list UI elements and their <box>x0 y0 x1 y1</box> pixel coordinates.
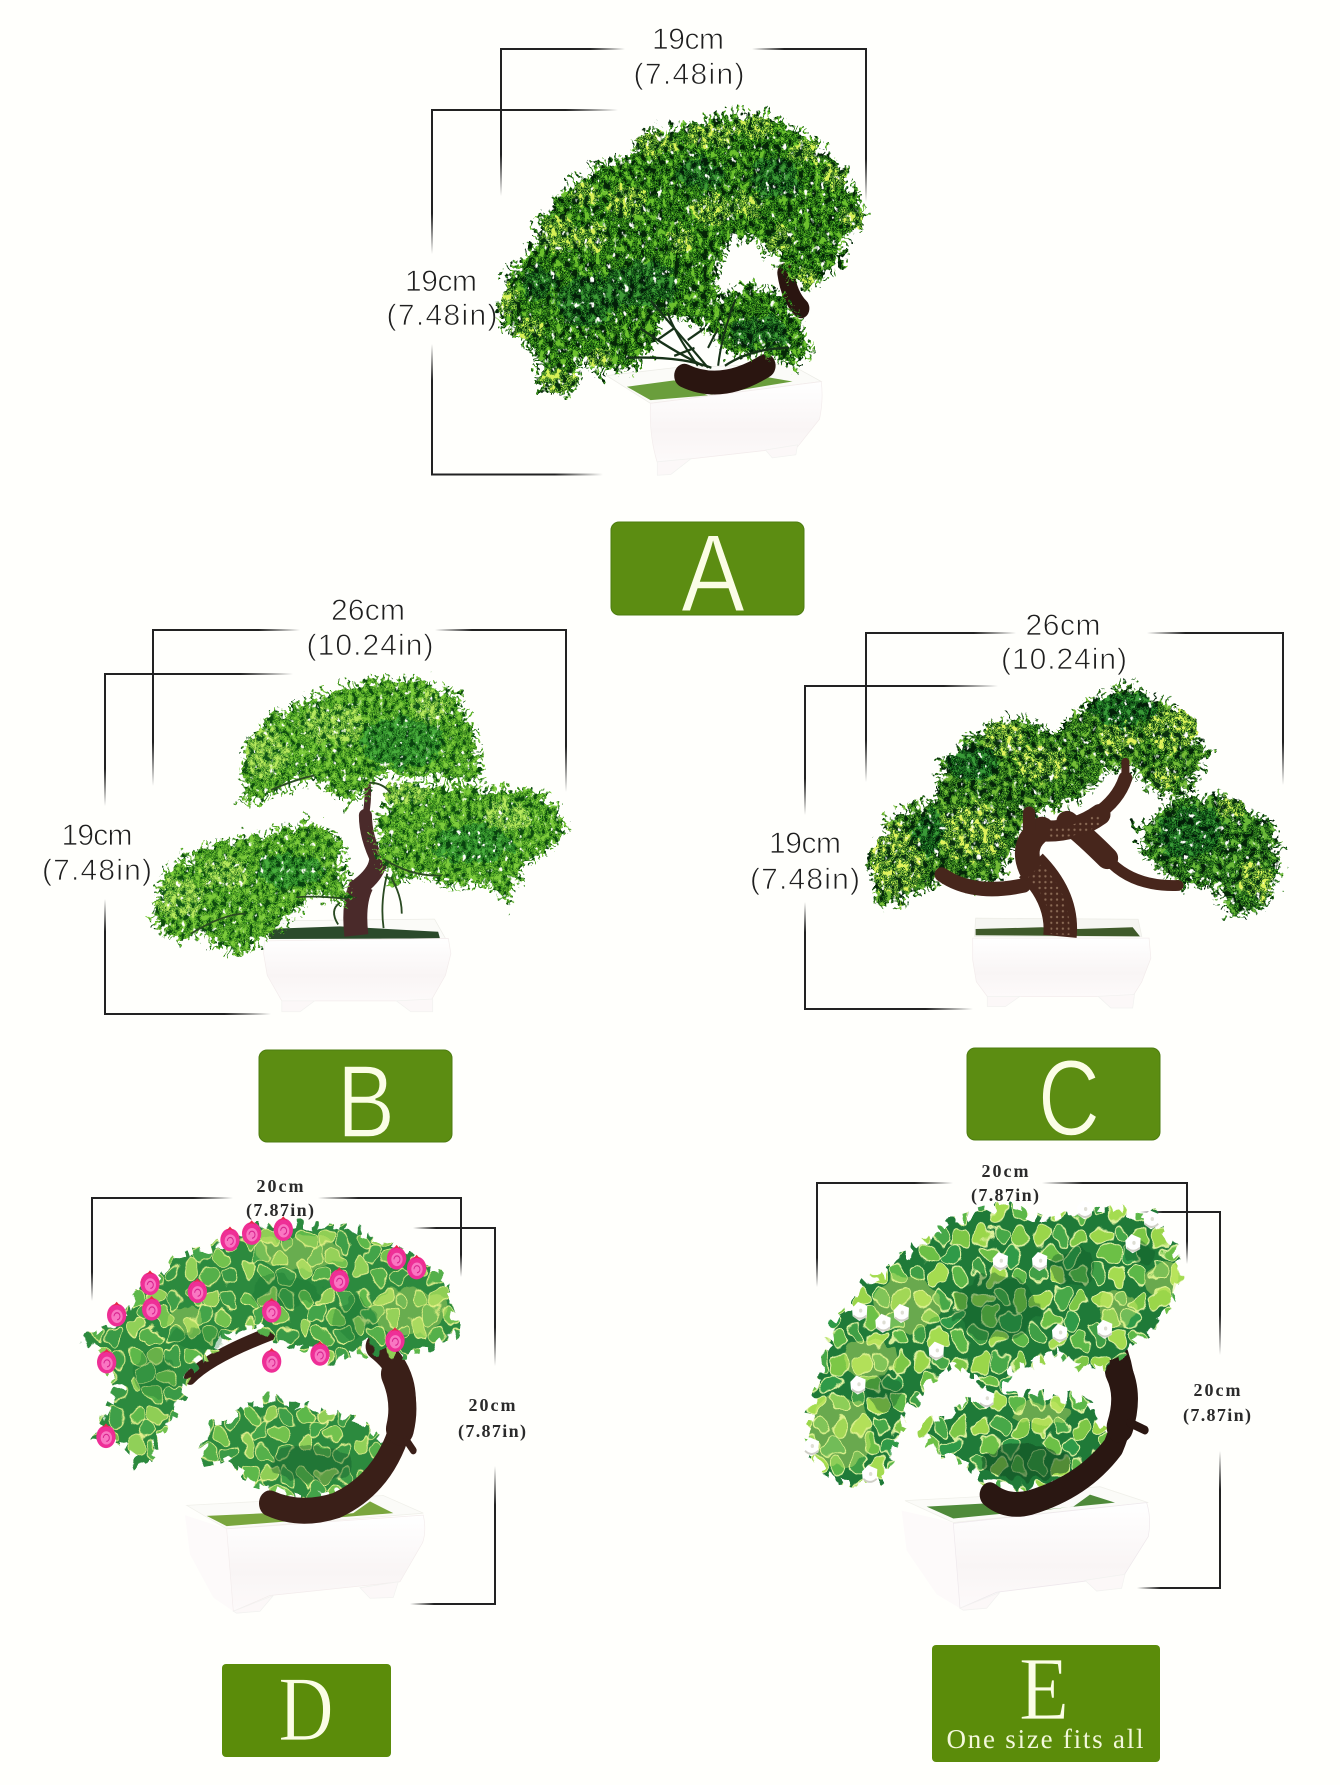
plant E <box>804 1200 1180 1610</box>
width label B: (10.24in) <box>306 629 434 662</box>
trunk A <box>684 273 801 383</box>
label badge A: A <box>681 512 746 635</box>
panel: bonsai B <box>42 594 567 1159</box>
plant B <box>155 681 567 1012</box>
pot D <box>185 1496 425 1613</box>
small bush D <box>208 1401 390 1496</box>
width label C: 26cm <box>1026 609 1100 642</box>
height label B <box>42 819 152 887</box>
width label D: 20cm <box>256 1176 304 1196</box>
width label A <box>634 23 744 91</box>
dimension brackets D <box>91 1197 496 1605</box>
trunk E <box>990 1355 1145 1504</box>
height label D: (7.87in) <box>458 1421 526 1442</box>
plant D <box>90 1216 453 1613</box>
width label E: 20cm <box>982 1161 1028 1181</box>
trunk D <box>190 1311 413 1511</box>
label badge D: D <box>278 1658 334 1760</box>
label badge E: One size fits all <box>946 1724 1144 1754</box>
label badge C: C <box>1038 1037 1100 1158</box>
foliage D <box>90 1229 453 1464</box>
pot E <box>902 1487 1150 1610</box>
pot B <box>264 919 451 1012</box>
height label E: (7.87in) <box>1183 1405 1251 1426</box>
height label C: 19cm <box>769 827 841 860</box>
width label C: (10.24in) <box>1001 643 1127 676</box>
foliage B <box>155 681 567 954</box>
panel: bonsai D <box>90 1176 526 1760</box>
height label D: 20cm <box>468 1395 516 1415</box>
panel: bonsai E <box>804 1161 1251 1762</box>
width label A: (7.48in) <box>634 58 744 91</box>
height label E <box>1183 1380 1251 1426</box>
height label C <box>750 827 860 896</box>
width label D: (7.87in) <box>246 1200 314 1221</box>
width label D <box>246 1176 314 1221</box>
trunk bark texture C <box>1035 818 1100 935</box>
pot A <box>607 364 822 475</box>
pink flowers D <box>96 1216 426 1448</box>
label badge B <box>259 1044 452 1159</box>
height label A: 19cm <box>405 265 477 298</box>
twigs A <box>627 301 789 368</box>
foliage A <box>500 115 865 391</box>
height label A <box>386 265 498 332</box>
label badge A <box>611 512 804 635</box>
panel: bonsai A <box>386 23 867 635</box>
dimension brackets B <box>104 629 567 1015</box>
dimension brackets C <box>804 632 1284 1010</box>
foliage C <box>871 687 1278 916</box>
height label E: 20cm <box>1194 1380 1240 1400</box>
height label C: (7.48in) <box>750 863 860 896</box>
width label A: 19cm <box>652 23 724 56</box>
panel: bonsai C <box>750 609 1284 1158</box>
white flowers E <box>804 1200 1159 1484</box>
width label C <box>1001 609 1127 676</box>
height label B: 19cm <box>62 819 132 852</box>
plant A <box>500 115 865 475</box>
height label B: (7.48in) <box>42 854 152 887</box>
twigs B <box>191 775 442 934</box>
dimension brackets A <box>431 48 867 476</box>
label badge D <box>222 1658 391 1760</box>
label badge C <box>967 1037 1160 1158</box>
foliage E <box>808 1208 1180 1487</box>
trunk C <box>942 762 1178 936</box>
plant C <box>871 687 1278 1008</box>
width label B <box>306 594 434 662</box>
label badge E: E <box>1019 1640 1069 1739</box>
height label D <box>458 1395 526 1442</box>
width label E: (7.87in) <box>971 1185 1039 1206</box>
width label B: 26cm <box>331 594 405 627</box>
label badge E <box>932 1640 1160 1762</box>
pot C <box>973 918 1151 1008</box>
width label E <box>971 1161 1039 1206</box>
dimension brackets E <box>816 1182 1221 1589</box>
label badge B: B <box>337 1044 395 1159</box>
small bush E <box>927 1395 1117 1487</box>
trunk B <box>355 783 378 935</box>
height label A: (7.48in) <box>386 299 498 332</box>
